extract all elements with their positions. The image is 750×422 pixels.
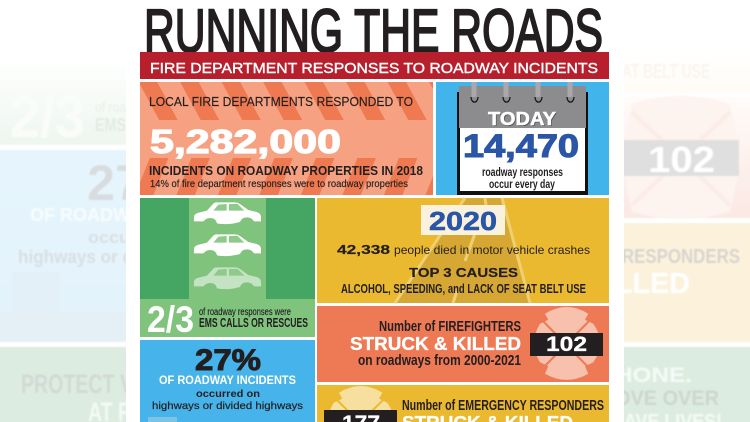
panel: EMS calls bbox=[140, 198, 315, 340]
panel: firefighters struck and killed: Number of FIREFIGHTERS bbox=[379, 319, 521, 335]
subtitle banner bbox=[140, 52, 609, 79]
blurred background: left side: occu bbox=[88, 228, 130, 247]
deaths stat: people died in motor vehicle crashes bbox=[394, 243, 590, 257]
calendar number: 14,470 bbox=[463, 128, 579, 164]
top causes bbox=[341, 266, 586, 296]
blurred background: right side bbox=[624, 64, 750, 422]
blurred background: right side: AT BELT USE bbox=[622, 61, 710, 83]
blurred background: left side: 27 bbox=[87, 155, 143, 211]
panel: 5,282,000 incidents bbox=[140, 82, 433, 195]
stat: 2/3: 2/3 bbox=[147, 299, 194, 340]
panel: emergency responders struck and killed bbox=[317, 385, 609, 422]
panel: firefighters struck and killed bbox=[317, 306, 609, 382]
top causes: TOP 3 CAUSES bbox=[409, 266, 518, 280]
panel: 27% of roadway incidents: occurred on bbox=[196, 388, 260, 400]
blurred background: left side: of roa bbox=[95, 99, 126, 115]
blurred background: left side: PROTECT V bbox=[21, 369, 133, 399]
icon: car bbox=[194, 202, 261, 224]
icon: maltese cross: 102 bbox=[546, 333, 587, 356]
blurred background: left side: OF ROADW bbox=[30, 205, 130, 225]
panel: 5,282,000 incidents: 5,282,000 bbox=[150, 123, 341, 160]
panel: 2020 crashes bbox=[317, 198, 609, 303]
blurred background: left side: EMS bbox=[95, 115, 126, 135]
panel: 27% of roadway incidents: OF ROADWAY INCIDENTS bbox=[159, 374, 296, 387]
icon: car bbox=[194, 234, 261, 256]
blurred background: right side: 102 bbox=[648, 139, 715, 180]
stat caption: EMS CALLS OR RESCUES bbox=[199, 316, 308, 330]
stat caption: of roadway responses were bbox=[199, 307, 291, 318]
panel: 27% of roadway incidents: highways or divided highways bbox=[152, 400, 303, 412]
icon: faded car bbox=[194, 267, 261, 289]
blurred background: right side: OVE OVER bbox=[615, 387, 719, 410]
calendar caption bbox=[482, 167, 563, 191]
panel: firefighters struck and killed: STRUCK & KILLED bbox=[350, 333, 521, 354]
year box: 2020 bbox=[429, 206, 497, 236]
blurred background: left side: highways or c bbox=[18, 247, 132, 267]
panel: 5,282,000 incidents: 14% of fire department responses were to roadway properties bbox=[150, 178, 408, 190]
stat caption bbox=[199, 307, 308, 330]
panel: 5,282,000 incidents: INCIDENTS ON ROADWAY PROPERTIES IN 2018 bbox=[149, 163, 423, 178]
subtitle banner: FIRE DEPARTMENT RESPONSES TO ROADWAY INCIDENTS bbox=[150, 60, 598, 77]
calendar heading: TODAY bbox=[489, 109, 558, 130]
panel: emergency responders struck and killed: Number of EMERGENCY RESPONDERS bbox=[402, 398, 604, 414]
icon: calendar bbox=[457, 82, 588, 195]
panel: 27% of roadway incidents bbox=[140, 340, 315, 422]
road graphic bbox=[395, 198, 530, 303]
blurred background: left side: 2/3 bbox=[10, 85, 85, 150]
icon: maltese cross bbox=[324, 386, 397, 422]
blurred background: right side: LLED bbox=[615, 268, 690, 300]
calendar caption: occur every day bbox=[489, 179, 555, 191]
calendar caption: roadway responses bbox=[482, 167, 563, 179]
icon: maltese cross bbox=[530, 307, 603, 380]
panel: today calendar bbox=[436, 82, 609, 195]
deaths stat: 42,338 bbox=[337, 242, 390, 257]
calendar heading: TODAY bbox=[488, 108, 557, 129]
year box bbox=[421, 205, 505, 236]
blurred background: right side: HONE. bbox=[615, 364, 692, 387]
panel: 27% of roadway incidents: 27% bbox=[195, 344, 261, 377]
blurred background: left side bbox=[0, 99, 126, 422]
panel: firefighters struck and killed: on roadways from 2000-2021 bbox=[358, 353, 521, 369]
top causes: ALCOHOL, SPEEDING, and LACK OF SEAT BELT USE bbox=[341, 281, 586, 296]
panel: 5,282,000 incidents: LOCAL FIRE DEPARTMENTS RESPONDED TO bbox=[149, 94, 413, 109]
